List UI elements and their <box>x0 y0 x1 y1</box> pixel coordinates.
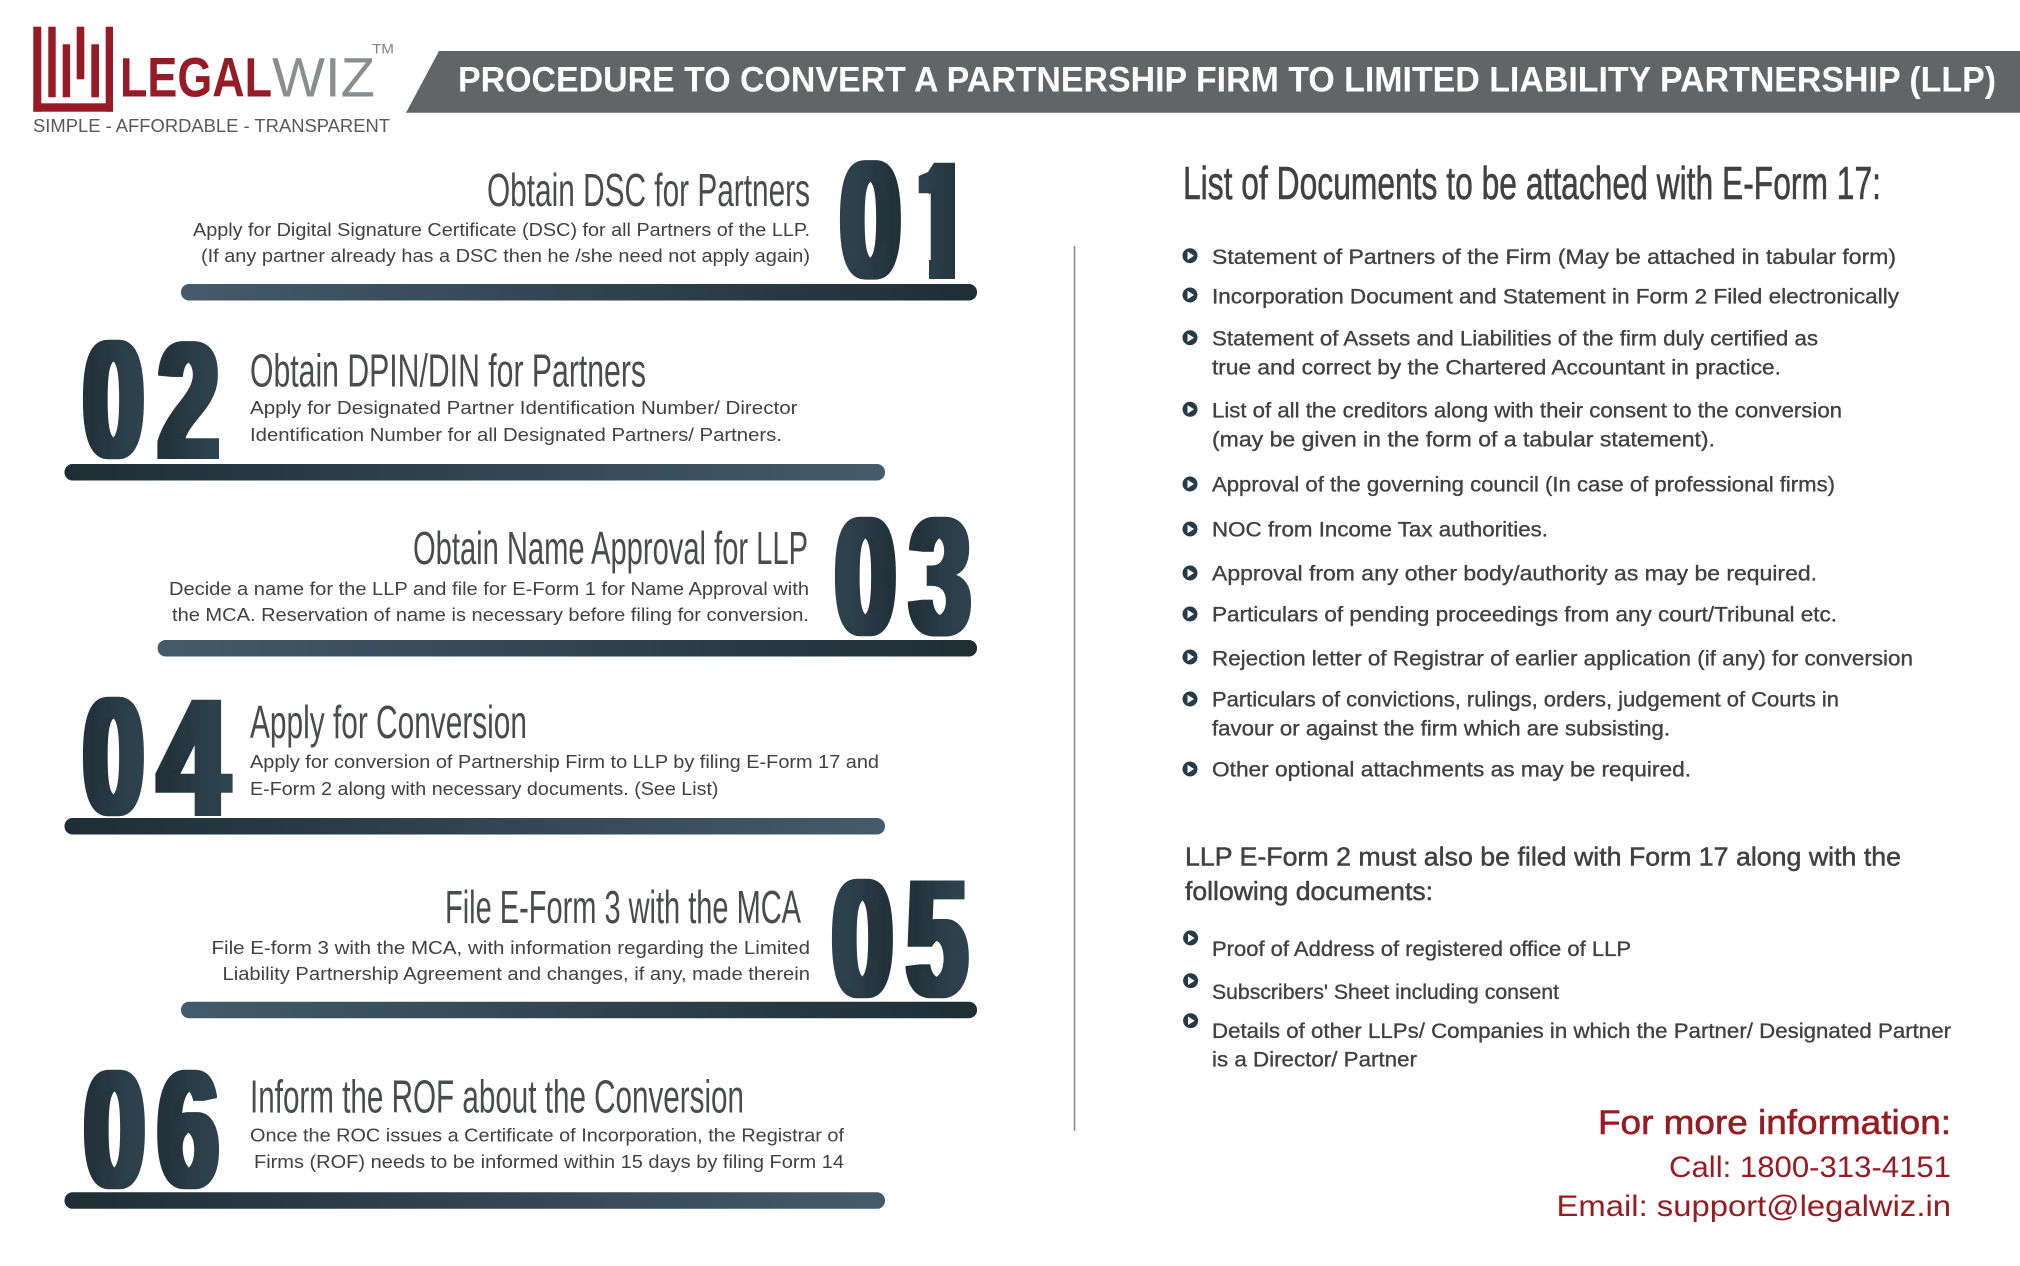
step 03 heading: Obtain Name Approval for LLP <box>413 522 808 574</box>
phone: Call: 1800-313-4151 <box>1669 1151 1951 1184</box>
step 01 number: 0 <box>841 128 900 313</box>
step 05 number <box>833 847 967 1032</box>
icon: logo bars <box>33 27 113 112</box>
list item: convictions: favour or against the firm which are subsisting. <box>1212 717 1670 741</box>
logo wordmark WIZ: WIZ <box>272 46 375 109</box>
step 05 heading: File E-Form 3 with the MCA <box>445 881 801 933</box>
list item: rejection letter: Rejection letter of Registrar of earlier application (if any) for conversion <box>1212 647 1913 671</box>
list item: other LLPs <box>1183 1013 1951 1072</box>
step 03 description: the MCA. Reservation of name is necessary before filing for conversion. <box>172 604 809 625</box>
step 02 description: Apply for Designated Partner Identification Number/ Director <box>250 397 798 418</box>
step 06 bar <box>64 1192 885 1209</box>
panel: step 03 <box>158 485 977 670</box>
step 05 number: 0 <box>833 847 892 1032</box>
step 01 description <box>193 219 810 266</box>
step 04 number: 0 <box>84 665 143 850</box>
step 06 heading: Inform the ROF about the Conversion <box>250 1071 744 1123</box>
list item: NOC: NOC from Income Tax authorities. <box>1212 518 1548 542</box>
list item: proof of address: Proof of Address of registered office of LLP <box>1212 937 1631 961</box>
E-Form 2 heading: LLP E-Form 2 must also be filed with Form 17 along with the <box>1185 842 1901 872</box>
step 01 bar <box>181 284 977 300</box>
logo: LegalWiz <box>33 27 394 136</box>
step 06 number: 0 <box>85 1038 144 1223</box>
list item: other LLPs: is a Director/ Partner <box>1212 1048 1417 1072</box>
list item: pending proceedings: Particulars of pending proceedings from any court/Tribunal etc. <box>1212 603 1837 627</box>
step 03 bar <box>158 640 977 656</box>
list item: convictions: Particulars of convictions, rulings, orders, judgement of Courts in <box>1212 688 1839 712</box>
list item: subscribers sheet: Subscribers' Sheet including consent <box>1212 980 1559 1004</box>
step 02 number: 0 <box>84 308 143 493</box>
header banner <box>406 51 2020 113</box>
step 06 description: Once the ROC issues a Certificate of Incorporation, the Registrar of <box>250 1125 845 1146</box>
step 01 description: (If any partner already has a DSC then he /she need not apply again) <box>201 245 810 266</box>
email: Email: support@legalwiz.in <box>1556 1190 1951 1223</box>
trademark: TM <box>372 40 394 56</box>
tagline: SIMPLE - AFFORDABLE - TRANSPARENT <box>33 115 390 136</box>
step 02 description: Identification Number for all Designated Partners/ Partners. <box>250 424 782 445</box>
step 02 bar <box>64 464 885 480</box>
step 06 number: 6 <box>158 1038 218 1223</box>
step 04 description: E-Form 2 along with necessary documents. (See List) <box>250 778 718 799</box>
step 03 number <box>836 485 970 670</box>
list item: governing council: Approval of the governing council (In case of professional firms) <box>1212 473 1835 497</box>
main title: PROCEDURE TO CONVERT A PARTNERSHIP FIRM TO LIMITED LIABILITY PARTNERSHIP (LLP) <box>458 61 1996 100</box>
list item: optional attachments: Other optional attachments as may be required. <box>1212 758 1691 782</box>
step 03 number: 3 <box>910 485 970 670</box>
step 03 number: 0 <box>836 485 895 670</box>
step 01 heading: Obtain DSC for Partners <box>487 164 810 216</box>
panel: list of documents for E-Form 17 <box>1182 157 1913 782</box>
list item: statement of assets <box>1182 327 1818 379</box>
step 02 heading: Obtain DPIN/DIN for Partners <box>250 345 646 397</box>
step 02 description <box>250 397 798 445</box>
list item: creditors: (may be given in the form of a tabular statement). <box>1212 428 1715 452</box>
step 01 number: 1 <box>909 129 973 314</box>
step 04 number <box>84 665 228 851</box>
list item: creditors: List of all the creditors along with their consent to the conversion <box>1212 399 1842 423</box>
step 04 description <box>250 751 879 799</box>
step 05 number: 5 <box>907 847 967 1032</box>
step 05 description: Liability Partnership Agreement and changes, if any, made therein <box>222 963 810 984</box>
step 04 number: 4 <box>158 666 228 851</box>
step 04 heading: Apply for Conversion <box>250 696 527 748</box>
panel: step 01 <box>181 160 977 300</box>
list item: statement of assets: Statement of Assets and Liabilities of the firm duly certified as <box>1212 327 1818 351</box>
panel: E-Form 2 documents <box>1183 842 1951 1072</box>
step 05 description: File E-form 3 with the MCA, with information regarding the Limited <box>212 937 810 958</box>
banner background <box>406 51 2020 113</box>
contact block <box>1556 1104 1951 1223</box>
step 04 description: Apply for conversion of Partnership Firm to LLP by filing E-Form 17 and <box>250 751 879 772</box>
step 03 description <box>169 578 809 625</box>
list item: other approval: Approval from any other body/authority as may be required. <box>1212 562 1817 586</box>
step 02 number <box>84 308 218 494</box>
list item: convictions <box>1182 688 1839 741</box>
step 03 description: Decide a name for the LLP and file for E-Form 1 for Name Approval with <box>169 578 809 599</box>
E-Form 2 heading: following documents: <box>1185 876 1433 906</box>
panel: step 05 <box>181 847 977 1032</box>
contact heading: For more information: <box>1598 1104 1951 1142</box>
step 05 bar <box>181 1002 977 1018</box>
step 01 description: Apply for Digital Signature Certificate (DSC) for all Partners of the LLP. <box>193 219 810 240</box>
list item: statement of assets: true and correct by the Chartered Accountant in practice. <box>1212 355 1781 379</box>
list item: statement of partners: Statement of Partners of the Firm (May be attached in tabular form) <box>1212 245 1896 269</box>
panel: step 06 <box>64 1038 885 1223</box>
logo wordmark LEGAL: LEGAL <box>120 46 272 109</box>
panel: step 04 <box>64 665 885 851</box>
step 05 description <box>212 937 810 984</box>
E-Form 2 heading <box>1185 842 1901 906</box>
list item: other LLPs: Details of other LLPs/ Companies in which the Partner/ Designated Partner <box>1212 1019 1951 1043</box>
step 06 description <box>250 1125 845 1172</box>
step 06 description: Firms (ROF) needs to be informed within 15 days by filing Form 14 <box>254 1151 844 1172</box>
step 04 bar <box>64 818 885 834</box>
list item: incorporation document: Incorporation Document and Statement in Form 2 Filed electronically <box>1212 284 1899 308</box>
step 01 number <box>840 160 955 280</box>
panel: step 02 <box>64 308 885 494</box>
step 06 number <box>85 1038 218 1223</box>
step 02 number: 2 <box>159 309 218 494</box>
list item: creditors <box>1182 399 1842 452</box>
